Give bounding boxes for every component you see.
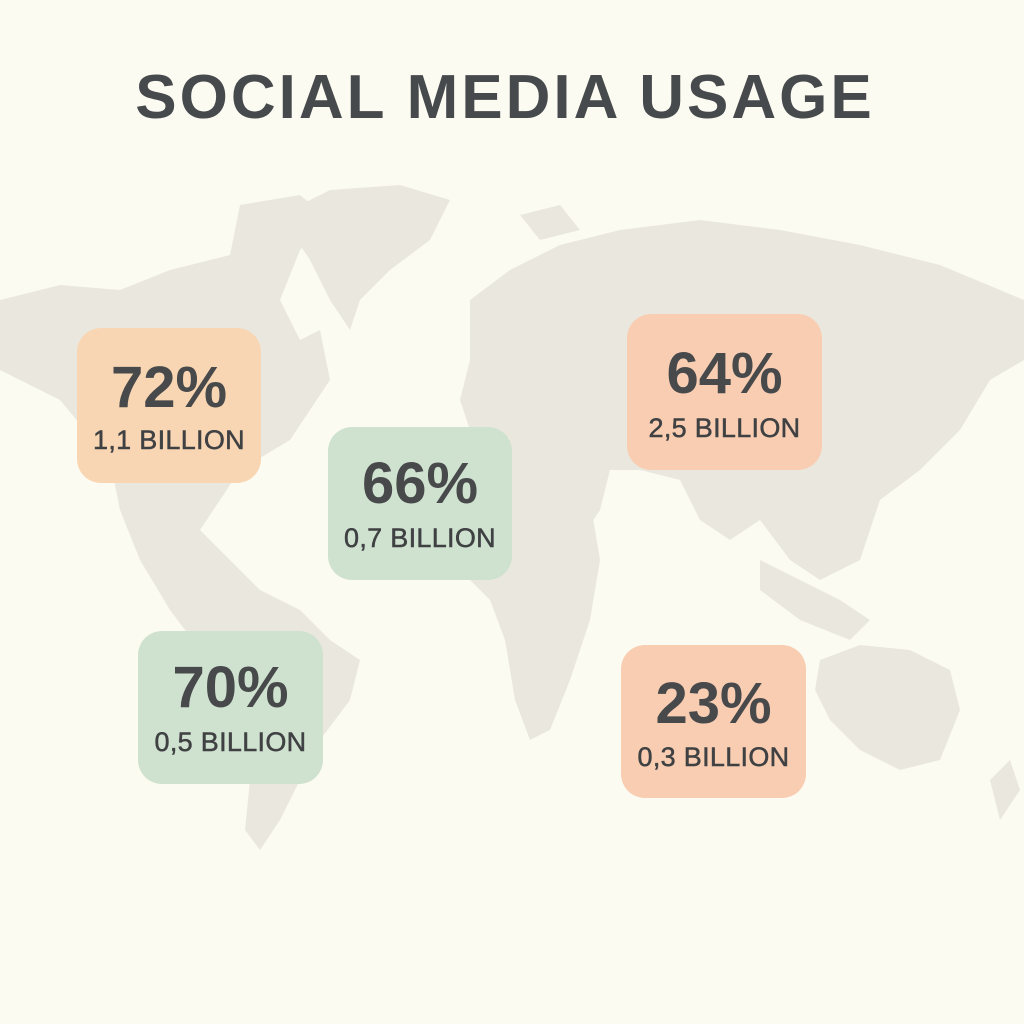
card: 23% (621, 645, 806, 798)
card: 72%: 1,1 BILLION (93, 425, 245, 455)
title: SOCIAL MEDIA USAGE (135, 63, 875, 132)
card: 66% (328, 427, 512, 580)
card: 72% (77, 328, 261, 483)
card: 66%: 66% (362, 451, 478, 516)
card: 70% (138, 631, 323, 784)
card: 23%: 0,3 BILLION (638, 742, 789, 772)
card: 64%: 64% (666, 341, 783, 406)
card: 72%: 72% (111, 355, 227, 420)
card: 70%: 0,5 BILLION (155, 727, 306, 757)
card: 66%: 0,7 BILLION (344, 523, 496, 553)
card: 64%: 2,5 BILLION (649, 413, 800, 443)
card: 64% (627, 314, 822, 470)
card: 70%: 70% (172, 655, 289, 720)
card: 23%: 23% (655, 671, 772, 736)
